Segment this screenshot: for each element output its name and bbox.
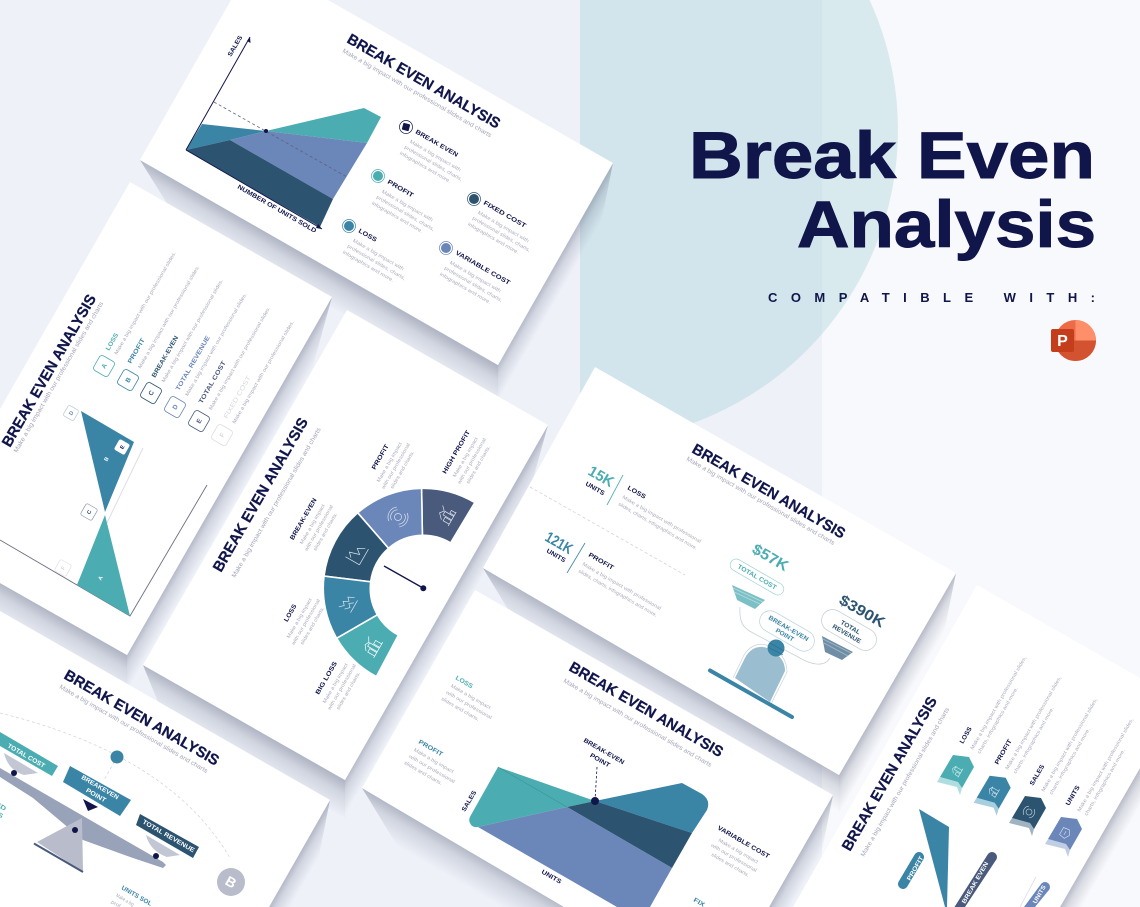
gauge needle — [384, 566, 426, 591]
label: loss: LOSS — [283, 603, 298, 623]
chart: hourglass triangles: E — [119, 444, 127, 451]
slide subtitle: Make a big impact with our professional slides and charts — [341, 48, 493, 139]
item: profit — [974, 675, 1063, 816]
item: fixed cost — [210, 320, 296, 447]
label: loss: Make a big impact — [450, 683, 492, 711]
label: big loss: with our professional — [327, 663, 358, 711]
item: fixed cost: F — [219, 432, 227, 439]
label: loss — [440, 674, 502, 728]
tag: total revenue: TOTAL REVENUE — [141, 819, 196, 854]
stat: 121K profit: PROFIT — [587, 552, 615, 572]
slide subtitle: Make a big impact with our professional slides and charts — [231, 427, 323, 579]
compatible with label: COMPATIBLE WITH: — [768, 290, 1095, 305]
main title: Break Even — [689, 118, 1095, 192]
legend: variable cost: infographics and more. — [438, 272, 492, 306]
panel: crossing area slide — [362, 590, 833, 907]
item: loss — [937, 655, 1028, 795]
label: variable cost: slides and charts. — [710, 852, 750, 879]
label: big loss: Make a big impact — [322, 662, 350, 704]
item: break-even — [139, 278, 225, 405]
label: big loss: slides and charts. — [335, 671, 362, 711]
stat: 121K profit: slides, charts, infographics and more. — [577, 569, 658, 619]
tag: total cost: TOTAL COST — [6, 743, 46, 770]
chart: hourglass triangles — [0, 405, 207, 616]
label: profit — [365, 433, 418, 494]
label: break-even: slides and charts. — [312, 512, 339, 552]
pill: profit: PROFIT — [907, 855, 925, 882]
panel: seesaw slide — [0, 611, 330, 907]
slide title: BREAK EVEN ANALYSIS — [0, 292, 100, 450]
item: total revenue: Make a big impact with our professional slides. — [184, 292, 249, 397]
chart: hourglass triangles: F — [60, 565, 68, 571]
stat: 15K loss: LOSS — [626, 485, 647, 501]
main title — [689, 118, 1096, 261]
stat: 15K loss: Make a big impact with professional — [621, 495, 702, 545]
label: profit: Make a big impact — [376, 441, 404, 483]
chart: hourglass triangles: C — [86, 509, 93, 516]
pill: break-even point: BREAK-EVEN — [767, 615, 810, 643]
label: variable cost — [703, 825, 771, 883]
item: loss: A — [100, 362, 109, 370]
tag: breakeven point — [63, 766, 131, 816]
item: profit: charts, infographics and more. — [1013, 706, 1056, 775]
panel: gauge slide — [143, 310, 548, 818]
panel: area chart slide — [140, 0, 613, 403]
label: loss: slides and charts. — [440, 696, 480, 723]
crossing area chart — [469, 767, 708, 907]
value: $57K: $57K — [749, 541, 791, 575]
label: break-even — [288, 495, 341, 556]
pill: break-even point — [756, 607, 818, 655]
icon: break-even line — [346, 541, 368, 565]
balance scale — [710, 585, 853, 717]
legend: fixed cost: professional slides, charts, — [471, 216, 531, 254]
item: total revenue: D — [171, 403, 180, 411]
pill: total revenue: REVENUE — [831, 623, 862, 645]
item: fixed cost: FIXED COST — [223, 375, 253, 420]
legend: loss: professional slides, charts, — [346, 244, 406, 282]
legend: fixed cost: FIXED COST — [482, 200, 527, 230]
item: sales: Make a big impact with professional slides, — [1041, 697, 1099, 793]
icon: PowerPoint: P — [1057, 333, 1068, 350]
stat: 15K loss — [584, 463, 702, 552]
item: profit: Make a big impact with our professional slides. — [137, 265, 201, 370]
pill: total cost: TOTAL COST — [736, 563, 778, 592]
legend: variable cost: VARIABLE COST — [454, 250, 511, 287]
label: variable cost: with our professional — [710, 843, 758, 874]
slide title: BREAK EVEN ANALYSIS — [344, 31, 503, 132]
item: total cost: E — [196, 417, 204, 425]
pill: break even — [954, 852, 997, 907]
label: loss: with our professional — [291, 598, 322, 646]
area chart: SALES — [227, 35, 244, 58]
legend: break even: infographics and more. — [398, 151, 452, 185]
icon: loss line — [339, 593, 358, 613]
item: units — [1045, 717, 1135, 857]
item: profit: PROFIT — [127, 337, 147, 365]
gauge chart — [323, 488, 475, 677]
slide title: BREAK EVEN ANALYSIS — [566, 659, 726, 761]
slide subtitle: Make a big impact with our professional slides and charts — [685, 456, 836, 547]
triangle chart — [919, 809, 949, 907]
legend: variable cost: Make a big impact with — [448, 260, 502, 294]
item: sales: SALES — [1029, 764, 1046, 787]
axis label: units: UNITS — [540, 869, 563, 886]
item: break-even: Make a big impact with our professional slides. — [161, 278, 225, 384]
legend: loss — [341, 220, 416, 288]
label: loss: Make a big impact — [286, 597, 314, 639]
label: loss: with our professional — [445, 690, 493, 721]
stat: 15K loss: 15K — [585, 463, 617, 491]
chart: hourglass triangles: A — [98, 575, 105, 582]
badge: B: B — [223, 873, 239, 891]
stat: 15K loss: UNITS — [584, 481, 606, 497]
label: break-even point: POINT — [588, 752, 611, 769]
item: profit: B — [124, 376, 133, 384]
badge: B — [217, 868, 245, 896]
label: high profit — [441, 428, 494, 489]
slide subtitle: Make a big impact with our professional slides and charts — [58, 684, 209, 775]
label: variable cost: VARIABLE COST — [716, 825, 771, 860]
slide title: BREAK EVEN ANALYSIS — [839, 694, 941, 854]
pill: units — [1020, 877, 1050, 907]
item: loss — [92, 251, 178, 378]
item: total cost — [187, 306, 272, 433]
label: break-even: Make a big impact — [299, 503, 327, 545]
label: profit: slides and charts. — [403, 760, 443, 787]
label: profit — [403, 738, 465, 792]
item: sales: charts, infographics and more. — [1049, 727, 1092, 796]
item: loss: LOSS — [959, 726, 974, 745]
legend: loss: LOSS — [357, 228, 378, 244]
slide subtitle: Make a big impact with our professional slides and charts — [13, 301, 105, 454]
legend: break even: BREAK EVEN — [414, 129, 460, 159]
icon: big loss — [361, 635, 383, 658]
legend: break even: Make a big impact with — [408, 139, 462, 173]
item: break-even: C — [147, 389, 156, 397]
stat: 121K profit: UNITS — [545, 548, 567, 564]
pill: break-even point: POINT — [774, 627, 795, 643]
panel: hourglass slide — [0, 182, 332, 693]
slide subtitle: Make a big impact with our professional slides and charts — [562, 678, 713, 769]
item: loss: charts, infographics and more. — [977, 686, 1020, 755]
item: total cost: TOTAL COST — [198, 360, 228, 405]
label: profit: with our professional — [408, 754, 456, 785]
tag: breakeven point: BREAKEVEN — [80, 774, 120, 801]
item: sales — [1009, 697, 1099, 836]
label: big loss — [311, 654, 364, 715]
legend: profit: infographics and more. — [370, 201, 424, 235]
legend: variable cost — [438, 242, 513, 310]
axis label: sales: SALES — [461, 790, 478, 813]
legend: loss: infographics and more. — [341, 250, 395, 284]
item: total cost: Make a big impact with our professional slides. — [208, 306, 272, 411]
item: units: UNITS — [1065, 784, 1082, 807]
slide title: BREAK EVEN ANALYSIS — [210, 415, 312, 575]
area chart — [186, 35, 381, 235]
item: units: Make a big impact with professional slides, — [1077, 717, 1135, 813]
item: total revenue — [163, 292, 249, 419]
legend: profit — [370, 170, 445, 239]
legend: loss: Make a big impact with — [352, 238, 405, 272]
item: loss: Make a big impact with our professional slides. — [114, 251, 178, 356]
item: loss: Make a big impact with professional slides, — [970, 655, 1028, 751]
label: profit: Make a big impact — [412, 747, 455, 775]
legend: fixed cost: infographics and more. — [466, 222, 520, 256]
label: loss: slides and charts. — [299, 606, 326, 646]
pill: break even: BREAK EVEN — [962, 861, 990, 905]
pill: total revenue: TOTAL — [839, 619, 862, 636]
label: profit: PROFIT — [371, 443, 391, 471]
icon: PowerPoint — [1051, 320, 1096, 361]
stat: 121K profit: 121K — [542, 529, 576, 558]
legend: fixed cost: Make a big impact with — [476, 210, 530, 244]
icon: high profit — [435, 505, 456, 526]
stat: 121K profit — [542, 529, 662, 619]
tag: total revenue — [136, 814, 199, 858]
pill: profit — [903, 855, 925, 884]
label: profit: with our professional — [381, 442, 412, 490]
item: profit: PROFIT — [994, 738, 1014, 766]
item: units: charts, infographics and more. — [1084, 748, 1127, 817]
label: loss — [275, 589, 328, 650]
label: high profit: HIGH PROFIT — [441, 429, 472, 475]
panel: tags slide — [793, 585, 1140, 907]
pill: units: UNITS — [1033, 885, 1048, 905]
label: break-even point: BREAK-EVEN — [582, 737, 626, 766]
stat: 15K loss: slides, charts, infographics and more. — [617, 502, 698, 552]
pill: total cost — [728, 557, 786, 597]
legend: profit: Make a big impact with — [380, 189, 434, 223]
label: loss: LOSS — [454, 675, 474, 690]
legend: profit: professional slides, charts, — [375, 195, 435, 233]
label: break-even: with our professional — [304, 504, 335, 552]
item: profit — [116, 265, 201, 392]
item: profit: Make a big impact with professional slides, — [1005, 675, 1063, 771]
slide title: BREAK EVEN ANALYSIS — [61, 667, 222, 769]
legend: break even — [398, 120, 473, 189]
label: high profit: slides and charts. — [465, 445, 492, 485]
slide subtitle: Make a big impact with our professional slides and charts — [860, 706, 951, 858]
chart: hourglass triangles: D — [68, 410, 75, 417]
label: variable cost: Make a big impact — [717, 838, 760, 866]
legend: variable cost: professional slides, charts, — [443, 266, 503, 304]
area chart: NUMBER OF UNITS SOLD — [236, 184, 318, 235]
legend: fixed cost — [466, 192, 541, 260]
label: big loss: BIG LOSS — [314, 660, 339, 696]
main title: Analysis — [797, 187, 1096, 261]
item: fixed cost: Make a big impact with our professional slides. — [232, 320, 296, 425]
label: profit: PROFIT — [417, 739, 444, 758]
chart: hourglass triangles: B — [104, 456, 111, 463]
tag: breakeven point: POINT — [84, 787, 107, 804]
pill: total revenue — [818, 605, 880, 655]
panel: scale slide — [483, 367, 956, 813]
tag: total cost — [0, 732, 58, 776]
stat: 121K profit: Make a big impact with professional — [581, 562, 662, 612]
label: high profit: Make a big impact — [452, 436, 480, 478]
item: break-even: BREAK-EVEN — [151, 334, 180, 379]
label: profit: slides and charts. — [389, 450, 416, 490]
legend: break even: professional slides, charts, — [403, 145, 463, 183]
item: total revenue: TOTAL REVENUE — [175, 335, 212, 392]
item: loss: LOSS — [105, 332, 120, 352]
slide title: BREAK EVEN ANALYSIS — [689, 441, 848, 542]
legend: profit: PROFIT — [386, 179, 415, 199]
label: break-even: BREAK-EVEN — [289, 497, 319, 541]
value: $390K: $390K — [836, 592, 888, 632]
icon: profit coins — [385, 505, 411, 529]
seesaw chart — [0, 713, 230, 872]
label: units sold: UNITS SOL — [120, 885, 153, 907]
label: high profit: with our professional — [457, 437, 488, 485]
